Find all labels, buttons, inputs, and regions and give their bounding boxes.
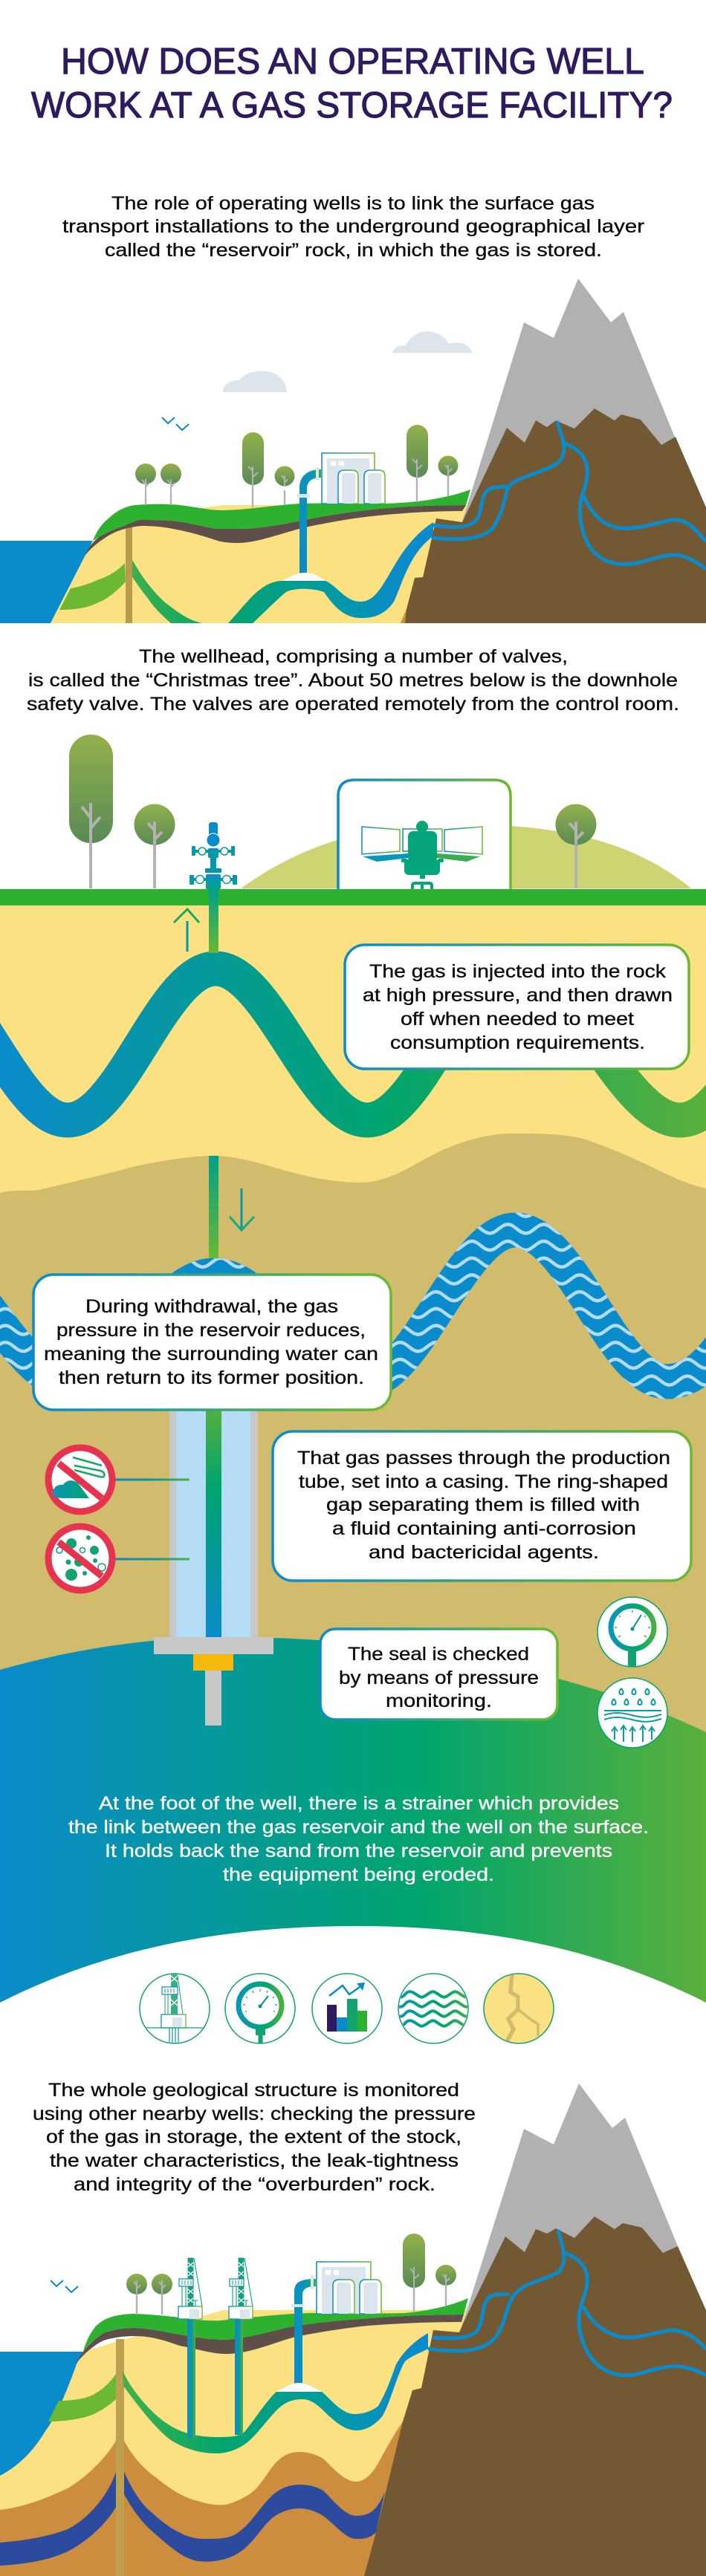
icon: water waves (394, 1974, 472, 2043)
landscape illustration: gas storage cross-section (0, 279, 706, 623)
sand layer (0, 2310, 468, 2576)
wellhead text: is called the “Christmas tree”. About 50 metres below is the downhole (28, 670, 678, 691)
callout: seal: by means of pressure (339, 1668, 539, 1688)
dome above gas (282, 573, 326, 581)
gas and water layer (123, 2333, 428, 2453)
callout: production tube: and bactericidal agents. (369, 1542, 599, 1563)
callout: withdrawal: During withdrawal, the gas (85, 1296, 338, 1317)
strainer text: the equipment being eroded. (223, 1864, 494, 1885)
mountain snow cap (462, 2084, 678, 2325)
rivers on mountain (433, 421, 706, 569)
icon: pressure gauge (597, 1597, 667, 1667)
callout: injected gas (345, 945, 689, 1069)
sand layer (51, 505, 476, 623)
dark caprock layer (77, 2315, 464, 2363)
tan vertical fault strip (116, 2339, 124, 2576)
derrick two (229, 2258, 253, 2319)
callout: injected gas: The gas is injected into the rock (369, 961, 667, 982)
surface facility building (322, 453, 385, 504)
callout: production tube: That gas passes through the production (297, 1448, 670, 1468)
icon row: monitoring (140, 1968, 554, 2046)
gas layer left part (59, 563, 126, 610)
title: WORK AT A GAS STORAGE FACILITY? (31, 85, 673, 126)
callout: withdrawal: pressure in the reservoir reduces, (56, 1320, 366, 1341)
icon: seal water and pressure (597, 1678, 667, 1748)
dark caprock layer (85, 505, 466, 555)
callout: production tube: a fluid containing anti-corrosion (332, 1518, 636, 1539)
intro text (62, 193, 644, 261)
hill (241, 824, 691, 888)
green ground layer (93, 489, 470, 541)
wellhead text: safety valve. The valves are operated remotely from the control room. (27, 694, 679, 715)
gas layer left part (48, 2374, 116, 2421)
strainer text (68, 1793, 649, 1885)
birds (51, 2280, 78, 2292)
icon: bar chart (312, 1974, 382, 2043)
pipe clamps (297, 467, 319, 498)
trees (126, 2234, 456, 2315)
well pipe to wave (209, 889, 218, 953)
lower landscape: monitoring wells cross-section (0, 2084, 706, 2576)
Christmas tree wellhead (190, 822, 237, 889)
callout: withdrawal: meaning the surrounding water can (44, 1344, 378, 1365)
operating well pipe (294, 2279, 316, 2386)
wellhead text (27, 646, 679, 715)
callout: seal: monitoring. (386, 1691, 492, 1711)
chair (401, 821, 444, 889)
strainer text: At the foot of the well, there is a strainer which provides (99, 1793, 619, 1814)
intro text: The role of operating wells is to link the surface gas (111, 193, 595, 214)
intro text: transport installations to the underground geographical layer (62, 216, 644, 237)
sea (0, 541, 93, 623)
monitors (362, 827, 482, 854)
mountain body (401, 409, 706, 623)
tan rock layer (0, 1133, 706, 1783)
connector lines (115, 1478, 190, 1560)
closing text: the water characteristics, the leak-tightness (50, 2150, 459, 2171)
down arrow (230, 1188, 254, 1230)
trees (135, 425, 458, 507)
callout: production tube (273, 1431, 691, 1581)
wellhead text: The wellhead, comprising a number of valves, (139, 646, 568, 667)
well casing cross-section (154, 1404, 273, 1726)
monitoring well pipes (187, 2318, 243, 2438)
trees on the surface (69, 735, 596, 888)
closing text: using other nearby wells: checking the pressure (33, 2104, 476, 2124)
sea (0, 2352, 85, 2476)
consoles (363, 853, 409, 862)
gas and water layer (132, 522, 433, 623)
title: HOW DOES AN OPERATING WELL (61, 42, 644, 82)
orange rock layer (0, 2421, 416, 2576)
rivers on mountain (428, 2230, 706, 2375)
callout: injected gas: off when needed to meet (401, 1009, 634, 1030)
deep aquifer layer (0, 2472, 385, 2566)
icon: no corrosion (48, 1448, 112, 1512)
mountain body (364, 2216, 706, 2576)
up arrow (174, 909, 199, 952)
callout: injected gas: consumption requirements. (390, 1032, 645, 1053)
icon: gauge (225, 1974, 295, 2043)
title (31, 42, 673, 126)
icon: drilling derrick (140, 1968, 210, 2046)
tan vertical fault strip (126, 524, 132, 623)
closing text (33, 2080, 476, 2195)
clouds (223, 331, 472, 392)
well pipe down to water (209, 1156, 218, 1258)
callout: production tube: gap separating them is filled with (326, 1494, 640, 1515)
pipe clamps (291, 2275, 314, 2307)
green ground layer (83, 2298, 468, 2352)
derrick one (178, 2258, 202, 2319)
birds (162, 417, 189, 430)
callout: production tube: tube, set into a casing. The ring-shaped (299, 1471, 668, 1492)
green surface strip (0, 889, 706, 905)
closing text: The whole geological structure is monitored (48, 2080, 459, 2101)
surface facility building (317, 2262, 381, 2314)
callout: withdrawal (33, 1275, 391, 1410)
injected gas wave (0, 969, 706, 1120)
callout: seal (320, 1629, 557, 1720)
icon: no bacteria (48, 1526, 112, 1590)
strainer text: It holds back the sand from the reservoir and prevents (105, 1841, 612, 1861)
well pipe (299, 469, 321, 574)
water wave (0, 1230, 706, 1382)
sand underground (0, 905, 706, 1203)
callout: withdrawal: then return to its former position. (59, 1367, 364, 1388)
gas reservoir dome (0, 1637, 706, 2003)
strainer text: the link between the gas reservoir and the well on the surface. (68, 1817, 649, 1838)
closing text: of the gas in storage, the extent of the stock, (46, 2127, 462, 2147)
control room panel (338, 780, 511, 889)
mountain orange sliver (401, 609, 407, 623)
callout: seal: The seal is checked (348, 1644, 529, 1665)
intro text: called the “reservoir” rock, in which the gas is stored. (105, 240, 602, 261)
closing text: and integrity of the “overburden” rock. (74, 2174, 435, 2195)
dome above gas (276, 2383, 322, 2392)
callout: injected gas: at high pressure, and then drawn (363, 985, 673, 1006)
mountain snow cap (462, 279, 676, 521)
icon: cracked rock (484, 1972, 554, 2044)
